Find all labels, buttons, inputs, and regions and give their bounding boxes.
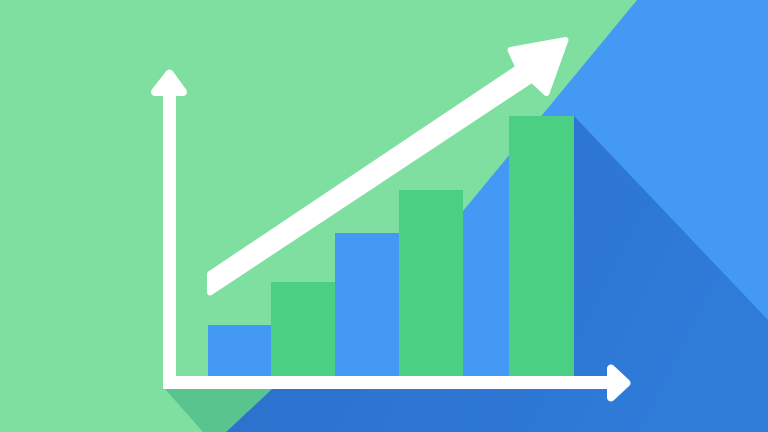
axes [155,74,626,398]
x axis line [163,376,611,389]
bar 5 [509,116,574,377]
bar 4 [399,190,463,377]
bar chart [208,116,574,377]
y axis arrowhead [155,74,183,92]
shadow: dark blue cast by chart [226,116,768,432]
x axis arrowhead [611,368,626,398]
bar 1 [208,325,271,377]
y axis line [163,90,176,389]
bar 2 [271,282,335,377]
shadow: dark green below axis [165,389,272,432]
bar 3 [335,233,399,377]
growth arrow [210,40,566,292]
background: blue diagonal panel [226,0,768,432]
